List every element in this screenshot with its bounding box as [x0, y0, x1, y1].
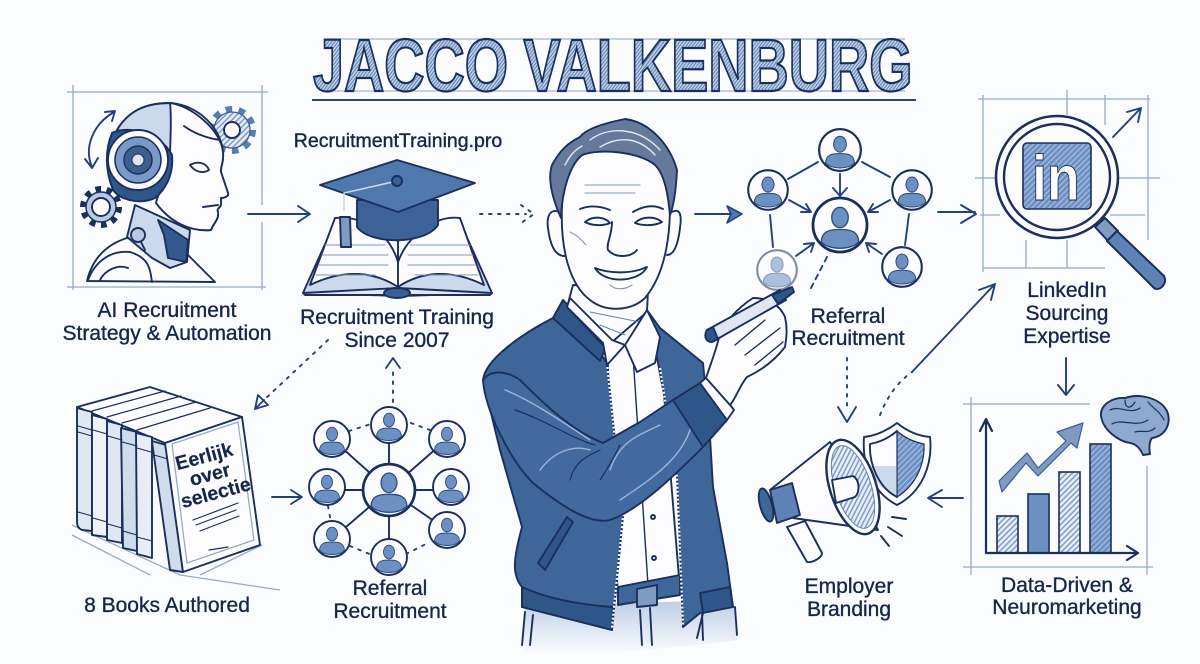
- label: referral right: Referral: [811, 305, 885, 328]
- icon: small gear: [83, 189, 119, 225]
- sleeve: [483, 372, 727, 521]
- shirt: [607, 345, 680, 600]
- label: AI recruitment: AI Recruitment: [98, 299, 237, 322]
- arrow: dotted curve: [880, 372, 912, 415]
- label: training since: Recruitment Training: [300, 306, 494, 329]
- panel: referral network right: [748, 129, 932, 350]
- icon: shield: [864, 423, 930, 505]
- trousers: [522, 600, 737, 654]
- label: employer: Employer: [805, 575, 893, 598]
- icon: network: [748, 129, 932, 290]
- icon: magnifier: [975, 90, 1165, 289]
- arrow: AI to training: [248, 206, 310, 222]
- label: LinkedIn: Sourcing: [1026, 302, 1108, 325]
- label: referral right: Recruitment: [791, 327, 905, 350]
- label: site name: RecruitmentTraining.pro: [294, 130, 502, 152]
- collar: [567, 298, 660, 372]
- hand: [706, 298, 787, 405]
- icon: brain: [1101, 396, 1169, 455]
- panel: referral network left: [309, 407, 469, 623]
- panel: LinkedIn: [975, 90, 1165, 348]
- panel: AI recruitment: [63, 85, 271, 345]
- label: LinkedIn: LinkedIn: [1027, 279, 1107, 302]
- icon: large gear: [211, 109, 253, 151]
- hair: [550, 119, 677, 218]
- arrow head: to books: [255, 395, 268, 409]
- panel: data chart: [963, 396, 1169, 619]
- person: [483, 119, 794, 654]
- neck: [567, 285, 648, 345]
- arrow: dotted down: [846, 358, 848, 412]
- panel: employer branding: [756, 423, 930, 621]
- arrow: chart to megaphone: [928, 490, 963, 507]
- arrow head: person to network: [727, 206, 742, 223]
- icon: network: [309, 407, 469, 575]
- arrow head: down: [838, 407, 856, 422]
- icon: books: [72, 387, 280, 590]
- panel: books: [72, 387, 280, 617]
- left ear: [548, 211, 566, 256]
- arrow: down: [1058, 358, 1074, 395]
- icon: magnifier: in: [1032, 142, 1080, 214]
- arrow: books to network: [272, 490, 302, 504]
- arrow: network to LinkedIn: [938, 205, 976, 223]
- text: book title: Eerlijk: [173, 439, 235, 475]
- label: referral left: Referral: [353, 577, 427, 600]
- title: JACCO VALKENBURG: [313, 24, 913, 107]
- panel: training: [294, 130, 502, 352]
- icon: megaphone: [756, 433, 906, 562]
- right ear: [667, 211, 681, 255]
- text: book title: over: [187, 459, 233, 491]
- arrow: dotted to books: [264, 340, 328, 400]
- arrow: dotted up: [392, 366, 394, 402]
- icon: rotate arrow: [85, 111, 115, 168]
- label: referral left: Recruitment: [333, 600, 447, 623]
- zipper: [607, 363, 683, 628]
- label: LinkedIn: Expertise: [1023, 325, 1111, 348]
- icon: bar chart: [980, 419, 1138, 560]
- label: data: Neuromarketing: [992, 596, 1142, 619]
- arrow: up to LinkedIn: [912, 284, 995, 372]
- arrow head: up: [386, 358, 400, 368]
- label: AI recruitment: Strategy & Automation: [63, 322, 271, 345]
- arrow: person to network: [695, 213, 730, 215]
- text: book title: selectie: [178, 473, 253, 513]
- jacket right: [647, 310, 733, 627]
- label: employer: Branding: [807, 598, 891, 621]
- face: [562, 150, 670, 309]
- marker: [705, 290, 786, 342]
- belt: [618, 575, 680, 605]
- icon: robot head: [87, 103, 228, 282]
- label: data: Data-Driven &: [1001, 574, 1133, 597]
- label: training since: Since 2007: [344, 329, 450, 352]
- icon: graduation cap and book: [303, 160, 492, 298]
- jacket left: [483, 300, 623, 630]
- arrow: dotted to person: [480, 205, 534, 223]
- cuff: [673, 383, 727, 447]
- label: books: 8 Books Authored: [84, 594, 250, 617]
